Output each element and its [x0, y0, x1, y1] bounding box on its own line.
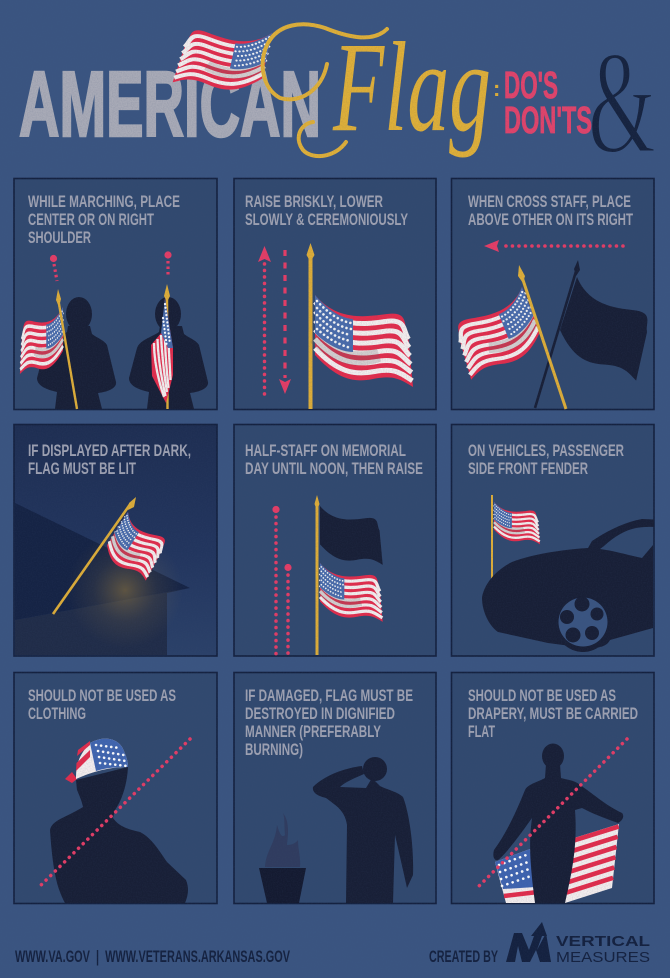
caption: RAISE BRISKLY, LOWER	[245, 192, 383, 211]
figure silhouette	[50, 767, 188, 903]
fire bucket	[259, 868, 306, 903]
prohibited diagonal	[39, 739, 190, 887]
title flag	[173, 12, 272, 103]
caption	[468, 441, 624, 478]
caption	[28, 686, 176, 723]
panel: vehicles	[452, 424, 654, 656]
flag bandana	[65, 739, 128, 783]
caption: FLAT	[468, 722, 495, 741]
title word: American: AMERICAN	[19, 52, 321, 156]
caption: FLAG MUST BE LIT	[28, 459, 137, 478]
figure silhouette	[493, 744, 623, 903]
panel: displayed after dark	[14, 424, 217, 656]
caption: MANNER (PREFERABLY	[245, 722, 381, 741]
title: do's: DO'S	[504, 65, 558, 107]
caption: SHOULDER	[28, 228, 91, 247]
caption: WHILE MARCHING, PLACE	[28, 192, 180, 211]
created by: CREATED BY	[429, 947, 498, 966]
caption	[28, 441, 191, 478]
caption: DAY UNTIL NOON, THEN RAISE	[245, 459, 423, 478]
dotted guide: half staff	[284, 564, 292, 655]
dotted guide: full staff	[272, 506, 280, 655]
caption: SLOWLY & CEREMONIOUSLY	[245, 210, 408, 229]
caption	[245, 441, 423, 478]
colon: :	[493, 76, 500, 101]
american crossed flag	[444, 265, 566, 409]
arrow: to the right of other flag	[484, 240, 623, 252]
caption: IF DAMAGED, FLAG MUST BE	[245, 686, 413, 705]
caption: HALF-STAFF ON MEMORIAL	[245, 441, 406, 460]
flagpole	[53, 497, 136, 614]
caption: CENTER OR ON RIGHT	[28, 210, 155, 229]
dark crossed flag	[535, 260, 662, 408]
prohibited diagonal	[478, 739, 627, 887]
dark flag at top	[320, 506, 383, 565]
caption: CLOTHING	[28, 704, 86, 723]
title word: Flag: Flag	[332, 16, 491, 158]
panel: cross staff	[444, 178, 662, 410]
caption: SHOULD NOT BE USED AS	[28, 686, 176, 705]
flagpole	[314, 495, 320, 655]
footer credit	[429, 922, 650, 966]
panel: while marching	[14, 178, 217, 410]
caption	[468, 686, 638, 741]
flagpole	[306, 243, 314, 409]
footer sources: WWW.VA.GOV | WWW.VETERANS.ARKANSAS.GOV	[15, 947, 290, 966]
small flag on fender	[492, 495, 540, 582]
panel: raise briskly	[234, 178, 436, 410]
panel: damaged flag	[234, 672, 436, 904]
figure with flag on right shoulder	[20, 255, 116, 409]
flag	[315, 295, 413, 387]
flat carried flag	[495, 824, 619, 903]
flames	[265, 813, 300, 867]
flourish of the script F	[263, 24, 387, 156]
figure with flag at center	[129, 251, 208, 409]
caption	[245, 192, 408, 229]
flag	[96, 512, 178, 581]
saluting figure	[313, 757, 413, 903]
logo word: measures: MEASURES	[556, 949, 650, 966]
arrow: raise	[258, 246, 271, 394]
car silhouette	[482, 519, 654, 652]
logo word: vertical: VERTICAL	[556, 933, 650, 950]
caption: IF DISPLAYED AFTER DARK,	[28, 441, 191, 460]
panel: drapery	[452, 672, 654, 904]
caption	[28, 192, 180, 247]
panel: clothing	[14, 672, 217, 904]
caption: DESTROYED IN DIGNIFIED	[245, 704, 395, 723]
arrow: lower	[279, 250, 291, 394]
caption	[468, 192, 634, 229]
caption: SIDE FRONT FENDER	[468, 459, 588, 478]
building roof and wall	[15, 503, 190, 655]
title	[19, 12, 656, 185]
caption: BURNING)	[245, 740, 303, 759]
flag at half staff	[320, 563, 383, 622]
panel: half-staff	[234, 424, 436, 656]
caption	[245, 686, 413, 759]
light glow	[67, 532, 183, 648]
title: don'ts: DON'TS	[504, 100, 592, 142]
logo mark	[506, 922, 551, 962]
